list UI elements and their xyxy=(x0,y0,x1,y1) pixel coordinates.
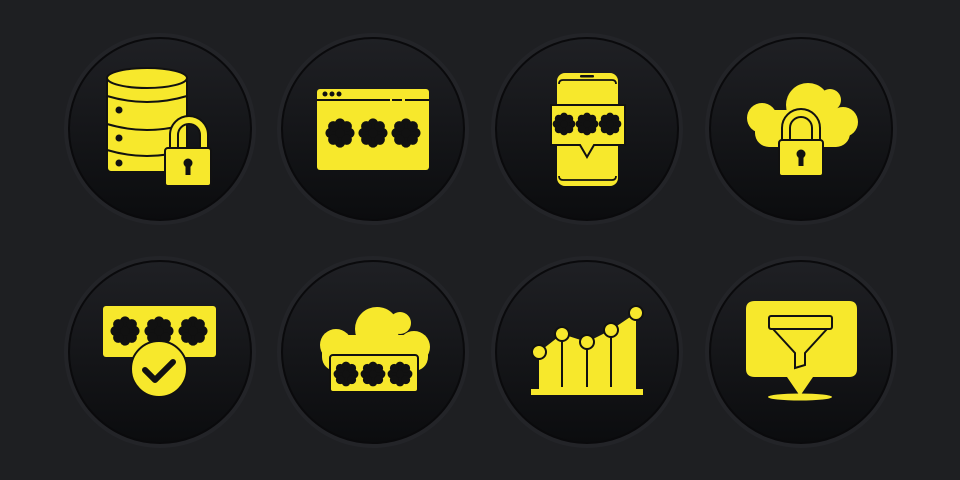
panel: phone password xyxy=(491,33,683,225)
icon: password field xyxy=(330,355,418,392)
icon: cloud xyxy=(747,83,858,147)
icon: padlock xyxy=(779,113,823,176)
icon: browser window xyxy=(317,89,429,170)
icon: cloud xyxy=(320,307,430,371)
chart: area bars xyxy=(531,306,643,395)
icon: funnel xyxy=(769,316,832,368)
icon: speech bubble xyxy=(746,301,857,400)
panel: cloud password xyxy=(277,256,469,448)
panel: funnel bubble xyxy=(705,256,897,448)
panel: cloud lock xyxy=(705,33,897,225)
icon: check circle xyxy=(131,341,187,397)
panel: browser password xyxy=(277,33,469,225)
icon: database xyxy=(107,68,187,172)
panel: growth chart xyxy=(491,256,683,448)
icon: padlock xyxy=(165,120,211,186)
panel: password check xyxy=(64,256,256,448)
icon: password field xyxy=(103,306,216,357)
panel: database lock xyxy=(64,33,256,225)
icon: phone xyxy=(551,73,625,186)
